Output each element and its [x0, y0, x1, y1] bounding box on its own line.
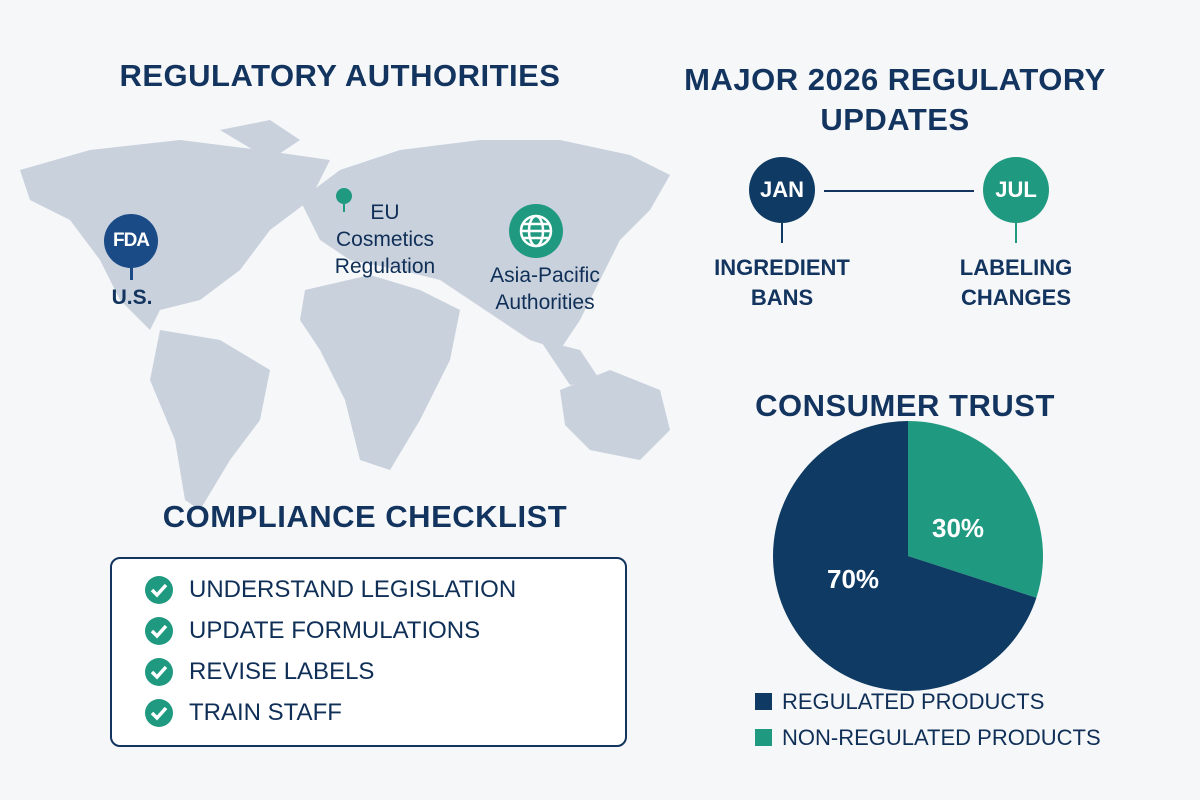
item: update formulations: UPDATE FORMULATIONS	[189, 617, 480, 644]
timeline: INGREDIENT	[714, 255, 850, 280]
item: understand legislation: UNDERSTAND LEGISLATION	[189, 576, 516, 603]
pin: FDA U.S.	[104, 214, 158, 309]
timeline: LABELING	[960, 255, 1072, 280]
title: major 2026 updates	[684, 62, 1106, 137]
legend: REGULATED PRODUCTS	[782, 689, 1044, 714]
title: consumer trust: CONSUMER TRUST	[755, 388, 1055, 423]
title: major 2026 updates: MAJOR 2026 REGULATORY	[684, 62, 1106, 97]
pin: EU: EU	[370, 201, 400, 224]
timeline: JUL	[995, 177, 1037, 202]
pin: Asia-Pacific	[490, 204, 600, 314]
pie chart	[773, 421, 1043, 691]
pin: EU: Regulation	[335, 255, 435, 278]
pin: Asia-Pacific: Asia-Pacific	[490, 264, 600, 287]
pin: FDA U.S.: U.S.	[112, 286, 152, 309]
item: train staff: TRAIN STAFF	[189, 699, 342, 726]
timeline: JAN	[760, 177, 804, 202]
timeline	[714, 157, 1072, 310]
item: revise labels: REVISE LABELS	[189, 658, 374, 685]
pie chart: 70%	[827, 564, 879, 594]
timeline: BANS	[751, 285, 813, 310]
title: major 2026 updates: UPDATES	[820, 102, 970, 137]
title: regulatory authorities: REGULATORY AUTHORITIES	[119, 58, 560, 93]
timeline: CHANGES	[961, 285, 1071, 310]
legend: NON-REGULATED PRODUCTS	[782, 725, 1101, 750]
pie chart: 30%	[932, 513, 984, 543]
pin: FDA U.S.: FDA	[113, 230, 149, 251]
panel: checklist	[110, 557, 627, 747]
pin: Asia-Pacific: Authorities	[495, 291, 595, 314]
pin: EU: Cosmetics	[336, 228, 434, 251]
title: compliance checklist: COMPLIANCE CHECKLIST	[163, 499, 567, 534]
pin: EU	[335, 188, 435, 278]
legend	[755, 689, 1101, 750]
